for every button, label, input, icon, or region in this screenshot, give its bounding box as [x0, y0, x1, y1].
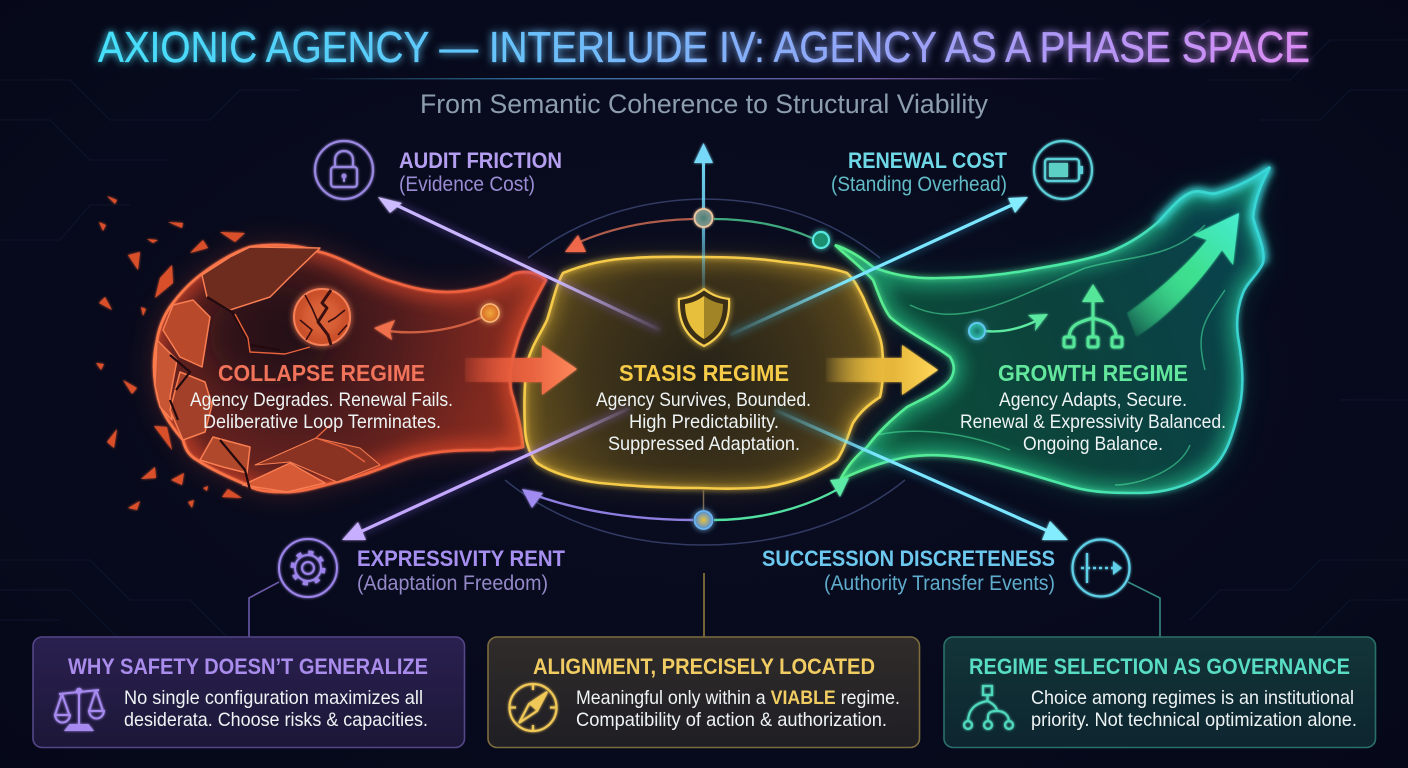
growth description: Renewal & Expressivity Balanced. [960, 411, 1226, 433]
text: safety body [124, 687, 428, 731]
arrow: inner to collapse [374, 304, 499, 340]
arrow: bottom arc to expressivity [522, 489, 693, 520]
arrow: audit friction [378, 197, 660, 330]
label: succession discreteness: SUCCESSION DISCRETENESS [762, 546, 1055, 571]
icon: lock [315, 141, 373, 199]
label: renewal cost: RENEWAL COST [848, 148, 1008, 173]
arrow: top arc to collapse [565, 219, 693, 252]
arrow: stasis to growth [826, 345, 938, 395]
icon: scales [55, 689, 104, 730]
arrow: renewal cost [730, 197, 1028, 335]
label: renewal cost: (Standing Overhead) [831, 173, 1007, 196]
subtitle: From Semantic Coherence to Structural Viability [420, 89, 988, 119]
top orbit node [694, 209, 712, 227]
icon: gear [279, 539, 337, 597]
arrow: inner to growth [969, 314, 1048, 339]
text: safety body: No single configuration maximizes all [124, 687, 423, 709]
text: governance body: Choice among regimes is an institutional [1031, 687, 1354, 709]
collapse description: Agency Degrades. Renewal Fails. [190, 389, 453, 411]
arrow: succession discreteness [775, 410, 1068, 540]
collapse heading: COLLAPSE REGIME [218, 360, 425, 386]
stasis description: Agency Survives, Bounded. [596, 389, 811, 411]
label: expressivity rent [357, 546, 566, 595]
growth description [960, 389, 1226, 455]
text: alignment body: Compatibility of action & authorization. [576, 709, 887, 731]
heading: governance: REGIME SELECTION AS GOVERNANCE [969, 654, 1350, 679]
text: governance body: priority. Not technical optimization alone. [1031, 709, 1357, 731]
collapse description: Deliberative Loop Terminates. [203, 411, 441, 433]
collapse description [190, 389, 453, 433]
heading: safety: WHY SAFETY DOESN’T GENERALIZE [68, 654, 428, 679]
label: audit friction: (Evidence Cost) [399, 173, 535, 196]
text: alignment body: Meaningful only within a VIABLE regime. [576, 687, 900, 709]
growth description: Ongoing Balance. [1023, 433, 1163, 455]
growth description: Agency Adapts, Secure. [999, 389, 1187, 411]
label: audit friction [399, 148, 562, 196]
icon: compass [510, 684, 556, 731]
bottom orbit node [694, 490, 712, 529]
arrow: growth trajectory [1127, 213, 1239, 337]
label: succession discreteness: (Authority Transfer Events) [824, 572, 1055, 595]
icon: decision tree [964, 686, 1013, 729]
panel: regime selection as governance [944, 637, 1376, 748]
arrow: collapse to stasis [465, 345, 577, 395]
heading: alignment: ALIGNMENT, PRECISELY LOCATED [533, 654, 875, 679]
icon: battery [1034, 141, 1092, 199]
growth heading: GROWTH REGIME [998, 360, 1188, 386]
label: expressivity rent: (Adaptation Freedom) [357, 572, 548, 595]
growth orbit node [813, 232, 829, 248]
stasis description: Suppressed Adaptation. [608, 433, 800, 455]
stasis heading: STASIS REGIME [619, 360, 789, 386]
shards [96, 196, 245, 510]
arrow: up axis [694, 143, 713, 300]
label: succession discreteness [762, 546, 1055, 595]
text: governance body [1031, 687, 1357, 731]
connector: succession to governance panel [1128, 582, 1160, 637]
arrow: expressivity rent [342, 408, 630, 540]
orbit paths [505, 199, 905, 545]
arrow: bottom arc to growth [714, 478, 849, 520]
wispy top of flame [1157, 167, 1270, 263]
icon: discrete transfer [1072, 540, 1130, 596]
cracked plates [155, 247, 380, 492]
connector: stasis to alignment panel [703, 573, 705, 637]
label: audit friction: AUDIT FRICTION [399, 148, 562, 173]
text: alignment body [576, 687, 900, 731]
connector: gear to safety panel [249, 582, 279, 637]
stasis description [596, 389, 811, 455]
label: expressivity rent: EXPRESSIVITY RENT [357, 546, 566, 571]
panel: alignment, precisely located [488, 637, 920, 748]
text: safety body: desiderata. Choose risks & capacities. [124, 709, 428, 731]
stasis description: High Predictability. [629, 411, 779, 433]
icon: cracked globe [294, 289, 350, 345]
icon: shield [679, 289, 729, 346]
panel: collapse regime [96, 196, 546, 510]
panel: stasis regime [524, 257, 883, 489]
panel: why safety doesn't generalize [33, 637, 464, 748]
panel: growth regime [835, 167, 1270, 493]
icon: branching arrow [1064, 284, 1122, 347]
label: renewal cost [831, 148, 1008, 196]
arrow: top arc to growth [714, 219, 812, 238]
